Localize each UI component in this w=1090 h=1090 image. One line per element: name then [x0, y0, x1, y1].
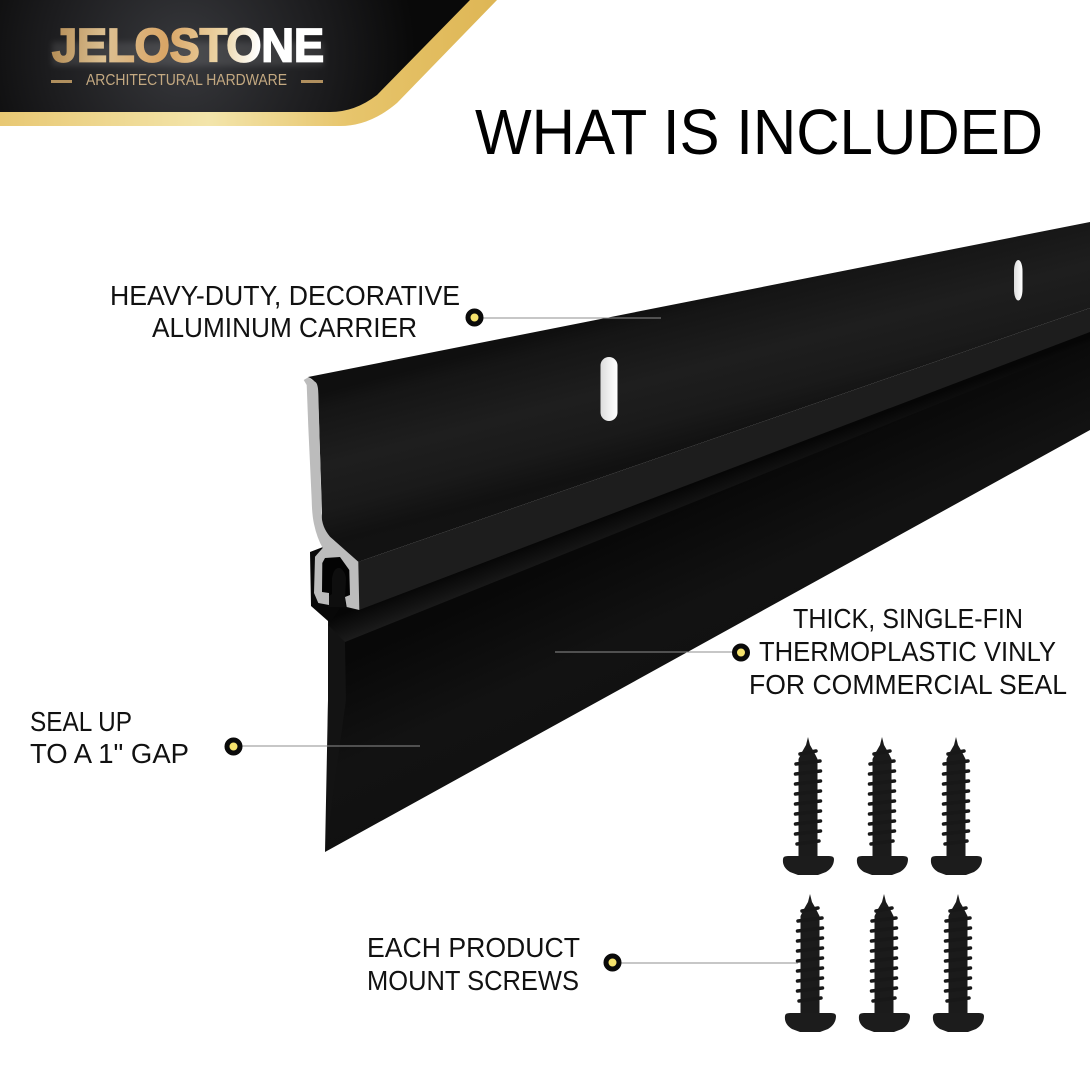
label text: ALUMINUM CARRIER	[152, 312, 417, 343]
channel interior	[322, 557, 350, 604]
marker dot	[468, 311, 481, 324]
vinyl fin	[310, 320, 1090, 852]
screw top row 2	[857, 737, 908, 875]
aluminum carrier upper panel	[308, 222, 1090, 562]
gold swoosh	[0, 0, 497, 126]
fin channel below carrier	[328, 332, 1090, 642]
label text: THICK, SINGLE-FIN	[793, 603, 1023, 634]
marker dot	[227, 740, 240, 753]
screw top row 1	[783, 737, 834, 875]
label text	[749, 603, 1067, 700]
label text	[110, 280, 460, 343]
title: WHAT IS INCLUDED	[475, 96, 1043, 168]
logo tagline: ARCHITECTURAL HARDWARE	[86, 72, 287, 89]
label text: FOR COMMERCIAL SEAL	[749, 669, 1067, 700]
screw bottom row 3	[933, 894, 984, 1032]
label text: MOUNT SCREWS	[367, 965, 579, 996]
leader line	[555, 651, 741, 653]
mounting slot right	[1014, 260, 1022, 300]
screw top row 3	[931, 737, 982, 875]
label text: THERMOPLASTIC VINLY	[759, 636, 1056, 667]
leader line	[233, 745, 420, 747]
header banner with logo	[0, 0, 497, 126]
label text	[367, 932, 580, 996]
cut-end aluminum profile	[304, 377, 359, 610]
label text: EACH PRODUCT	[367, 932, 580, 963]
label text: TO A 1" GAP	[30, 738, 189, 769]
label text: SEAL UP	[30, 706, 132, 737]
callout: aluminum carrier	[110, 280, 661, 343]
screws set	[783, 737, 984, 1032]
screw bottom row 2	[859, 894, 910, 1032]
mounting slot left	[600, 357, 618, 421]
label text: HEAVY-DUTY, DECORATIVE	[110, 280, 460, 311]
marker dot	[734, 646, 748, 659]
seal bulb inside channel	[328, 568, 346, 607]
marker dot	[606, 956, 619, 969]
callout: vinyl fin	[555, 603, 1067, 700]
door sweep product	[304, 222, 1090, 852]
label text	[30, 706, 189, 769]
aluminum carrier lower face	[358, 308, 1090, 610]
logo wordmark: JELOSTONE	[52, 18, 324, 72]
leader line	[474, 317, 661, 319]
callout: gap seal	[30, 706, 420, 769]
leader line	[612, 962, 798, 964]
callout: mount screws	[367, 932, 798, 996]
logo glow	[52, 42, 324, 66]
screw bottom row 1	[785, 894, 836, 1032]
fin left edge strip	[327, 621, 346, 840]
black banner shape	[0, 0, 470, 112]
